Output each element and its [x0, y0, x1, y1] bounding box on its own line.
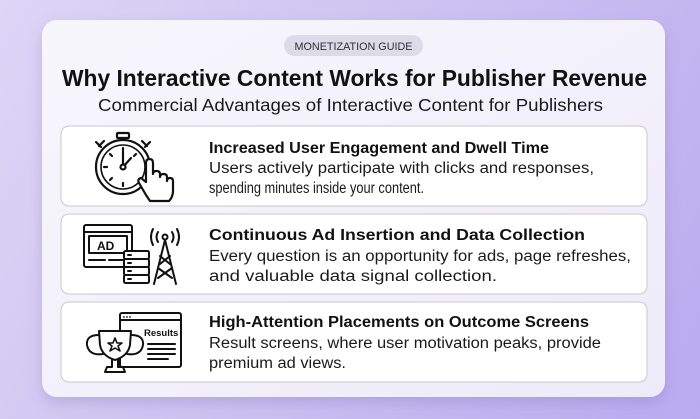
body text: [209, 248, 631, 285]
panel: outcome screens: [61, 302, 647, 382]
panel: ad insertion: [61, 214, 647, 294]
body text: Result screens, where user motivation peaks, provide: [209, 335, 601, 352]
heading: Increased User Engagement and Dwell Time: [209, 140, 549, 157]
title: Why Interactive Content Works for Publisher Revenue: [62, 65, 647, 91]
panel: outcome screens: Results: [144, 328, 178, 339]
body text: premium ad views.: [209, 355, 346, 372]
body text: and valuable data signal collection.: [209, 268, 497, 285]
body text: [209, 160, 594, 197]
subtitle: Commercial Advantages of Interactive Content for Publishers: [98, 95, 603, 115]
body text: [209, 335, 601, 372]
icon: stopwatch with hand: [96, 133, 173, 201]
body text: Every question is an opportunity for ads, page refreshes,: [209, 248, 631, 265]
heading: High-Attention Placements on Outcome Screens: [209, 314, 589, 331]
pill: monetization guide: [284, 35, 423, 56]
icon: ad window, server, tower: [84, 225, 179, 284]
body text: Users actively participate with clicks and responses,: [209, 160, 594, 177]
panel: engagement: [61, 126, 647, 206]
icon: trophy and results window: [87, 313, 181, 372]
body text: spending minutes inside your content.: [209, 180, 424, 197]
pill: monetization guide: MONETIZATION GUIDE: [294, 41, 412, 53]
panel: ad insertion: AD: [97, 239, 115, 253]
heading: Continuous Ad Insertion and Data Collection: [209, 227, 585, 244]
